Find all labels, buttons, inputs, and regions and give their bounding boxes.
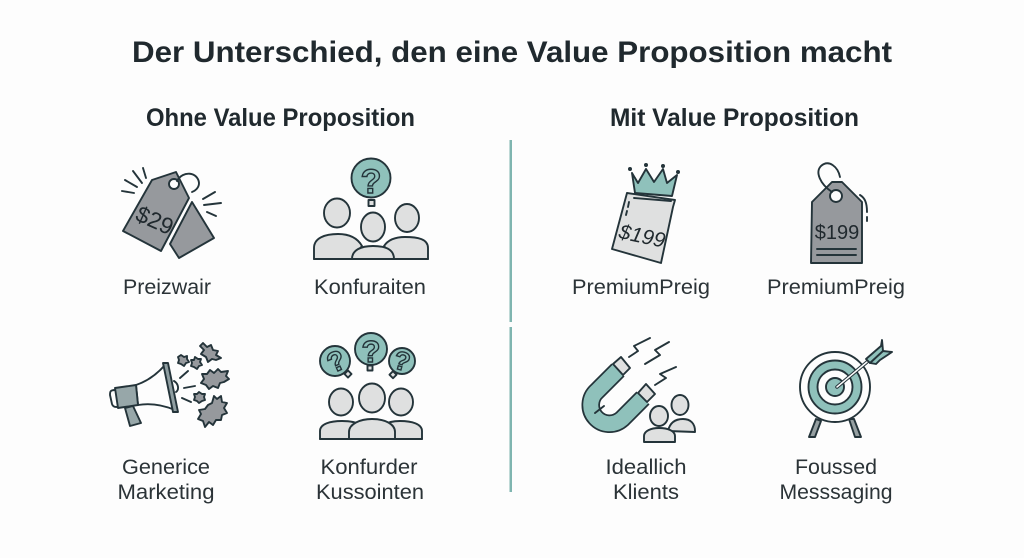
icon: confused people with question xyxy=(314,158,428,259)
item: Konfurder Kussointen xyxy=(316,333,424,504)
label line two: Messsaging xyxy=(780,481,892,504)
label: Konfuraiten xyxy=(314,276,426,299)
item: Ideallich Klients xyxy=(591,338,695,504)
item: Konfuraiten xyxy=(314,158,428,299)
item: PremiumPreig crown xyxy=(572,163,710,299)
item: Preizwair xyxy=(122,168,221,299)
label: PremiumPreig xyxy=(572,276,710,299)
label: Preizwair xyxy=(123,276,211,299)
item: Foussed Messsaging xyxy=(780,340,892,504)
label line two: Kussointen xyxy=(316,481,424,504)
label: Generice xyxy=(122,456,210,479)
label: Foussed xyxy=(795,456,877,479)
title: Der Unterschied, den eine Value Proposition macht xyxy=(132,36,892,69)
icon: target with arrow xyxy=(800,340,892,437)
icon: premium card with crown: $199 xyxy=(616,220,668,253)
icon: group with question marks: ? xyxy=(322,344,351,379)
icon: group with question marks: ? xyxy=(362,334,380,369)
item: PremiumPreig tag xyxy=(767,163,905,299)
heading: with value proposition: Mit Value Proposition xyxy=(610,104,859,132)
icon: magnet attracting clients xyxy=(591,338,695,442)
label line two: Klients xyxy=(613,481,679,504)
item: Generice Marketing xyxy=(110,343,229,504)
divider xyxy=(510,140,512,492)
icon: group with question marks xyxy=(320,333,422,439)
icon: group with question marks: ? xyxy=(390,344,414,378)
icon: megaphone with noise xyxy=(110,343,229,427)
label: PremiumPreig xyxy=(767,276,905,299)
icon: premium price tag: $199 xyxy=(815,222,859,244)
icon: broken price tag: $29 xyxy=(132,200,178,240)
heading: without value proposition: Ohne Value Proposition xyxy=(146,104,415,132)
label: Ideallich xyxy=(606,456,686,479)
label: Konfurder xyxy=(320,456,418,479)
icon: confused people with question: ? xyxy=(361,163,381,201)
label line two: Marketing xyxy=(118,481,214,504)
